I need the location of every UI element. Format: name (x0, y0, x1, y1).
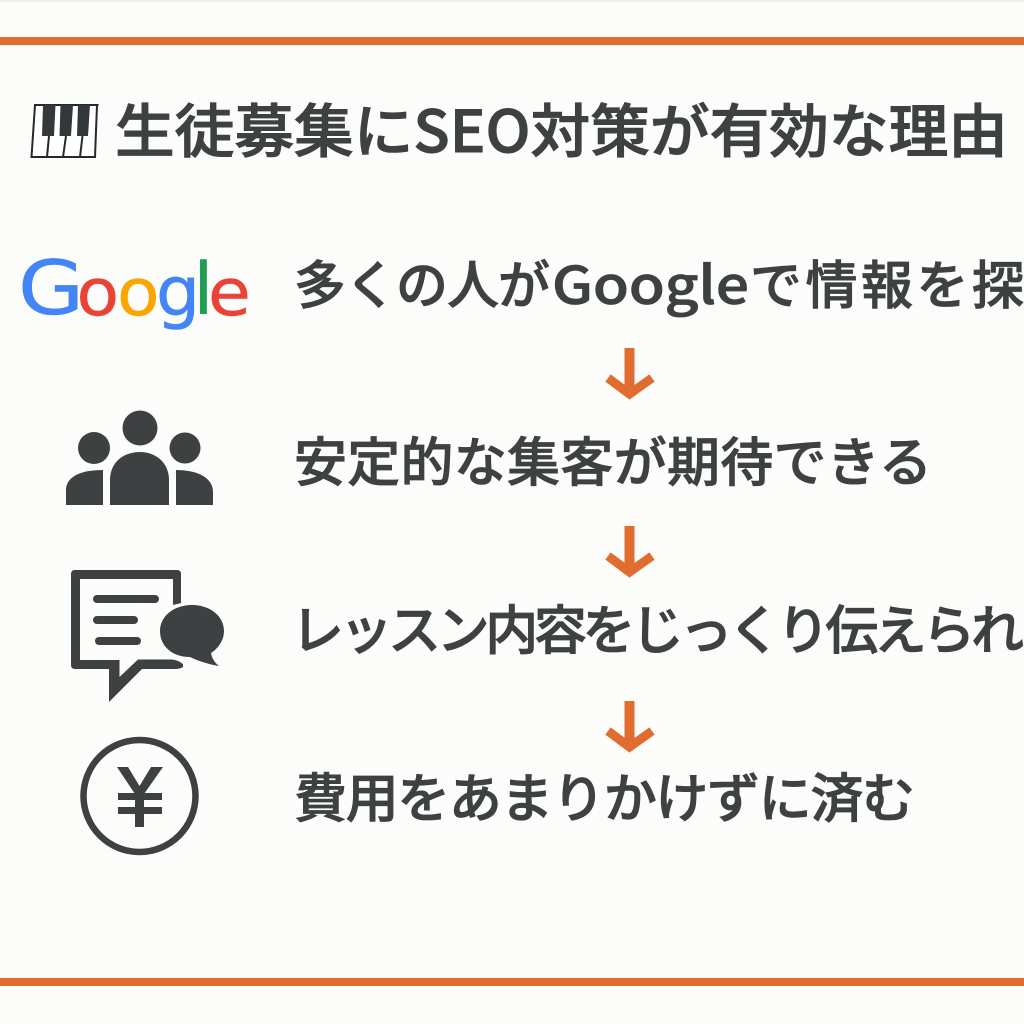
step 1 text: 多くの人が (294, 244, 550, 319)
bottom orange rule (0, 978, 1024, 986)
arrow 1 (608, 348, 652, 394)
arrow 3 (608, 701, 652, 747)
step 4 text: 費用をあまりかけずに済む (294, 757, 915, 833)
icon: yen coin (84, 740, 196, 852)
step 1 text: で情報を探 (750, 244, 1024, 319)
icon: Google logo (18, 244, 251, 332)
icon: Google logo: g (156, 253, 200, 332)
icon: Google logo: o (117, 255, 160, 330)
arrow 2 (608, 526, 652, 572)
step 3 text: レッスン内容をじっくり伝えられ (291, 589, 1024, 665)
icon: Google logo: e (208, 255, 251, 330)
icon: Google logo: o (76, 255, 119, 330)
icon: Google logo: G (18, 244, 84, 332)
top orange rule (0, 37, 1024, 45)
icon: Google logo: l (194, 248, 213, 331)
title: 生徒募集にSEO対策が有効な理由 (115, 85, 1008, 169)
step 1 text: Google (552, 244, 749, 319)
icon: piano keyboard (32, 105, 98, 157)
icon: document speech bubbles (71, 570, 224, 702)
step 2 text: 安定的な集客が期待できる (294, 421, 932, 497)
icon: group of people (66, 410, 213, 505)
